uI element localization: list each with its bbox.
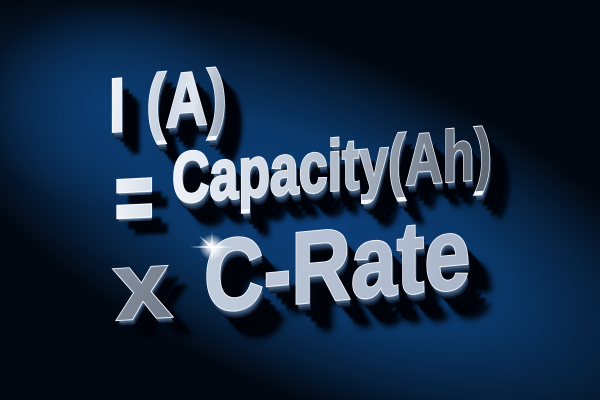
formula line 2: equals sign: = <box>115 144 153 253</box>
formula line 2: equals sign: = <box>115 144 153 253</box>
formula line 3: C-Rate: C-Rate <box>204 195 470 334</box>
formula line 2: Capacity(Ah): Capacity(Ah) <box>172 114 492 219</box>
formula line 2: Capacity(Ah): Capacity(Ah) <box>172 114 492 219</box>
formula line 1: I (A): I (A) <box>109 54 227 149</box>
formula line 3: C-Rate: C-Rate <box>204 195 470 334</box>
formula line 3: multiplication x: x <box>110 231 174 341</box>
formula line 1: I (A): I (A) <box>109 54 227 149</box>
formula line 3: multiplication x: x <box>110 231 174 341</box>
